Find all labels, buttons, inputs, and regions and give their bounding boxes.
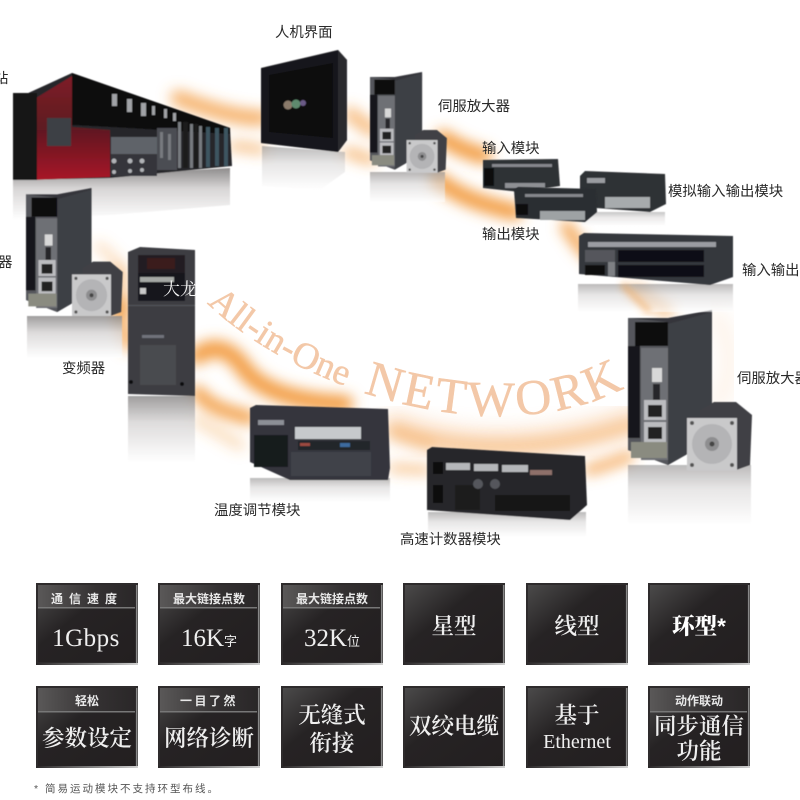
card: easy parameter setup: 参数设定 [42,726,132,751]
card: synchronous communication: 同步通信 [654,714,744,739]
card: synchronous communication [648,686,750,768]
card: line topology [526,583,628,665]
card: twisted pair cable [403,686,505,768]
card: communication speed: 1Gbps [52,625,120,652]
device: CPU rack [13,73,232,220]
tagline: All-in-One NETWORK: All-in-One NETWORK [206,292,624,418]
card: communication speed [36,583,138,665]
device: HMI touch panel [261,50,347,190]
label: analog IO module: 模拟输入输出模块 [668,183,783,200]
card: max link points 16K: 最大链接点数 [173,591,245,606]
card: network diagnostics [158,686,260,768]
card: seamless connection [281,686,383,768]
card: max link points 32K: 32K位 [304,625,360,652]
device: high-speed counter module [427,447,587,537]
card: network diagnostics: 一目了然 [180,693,238,708]
card: Ethernet based: Ethernet [543,731,611,753]
card: ring topology [648,583,750,665]
card: star topology: 星型 [431,614,477,639]
label: temperature module: 温度调节模块 [214,502,300,519]
card: max link points 16K [158,583,260,665]
card: max link points 32K: 最大链接点数 [296,591,368,606]
device: output module [514,187,597,222]
device: temperature control module [250,405,390,502]
card: twisted pair cable: 双绞电缆 [409,714,499,739]
card: easy parameter setup [36,686,138,768]
label: counter module: 高速计数器模块 [400,531,501,548]
device: analog IO module [580,171,666,226]
card: synchronous communication: 动作联动 [675,693,723,708]
watermark: 大龙 [163,280,197,299]
card: line topology: 线型 [554,614,600,639]
footnote: * 简易运动模块不支持环型布线。 [34,782,220,795]
card: seamless connection: 衔接 [309,731,355,756]
label: HMI: 人机界面 [275,24,333,41]
label: inverter: 变频器 [62,360,105,377]
device: input module [483,159,560,192]
card: seamless connection: 无缝式 [298,703,366,728]
label: output module: 输出模块 [482,226,540,243]
label: servo amplifier top: 伺服放大器 [438,98,510,115]
card: star topology [403,583,505,665]
card: synchronous communication: 功能 [676,739,722,764]
card: Ethernet based: 基于 [554,703,600,728]
card: easy parameter setup: 轻松 [75,693,99,708]
device: servo amplifier (left) [26,188,123,358]
card: max link points 32K [281,583,383,665]
card: communication speed: 通信速度 [51,591,123,606]
reflection [13,168,230,220]
card: max link points 16K: 16K字 [181,625,237,652]
card: network diagnostics: 网络诊断 [164,726,254,751]
card: Ethernet based [526,686,628,768]
device: servo amplifier (top) [370,72,447,202]
device: servo amplifier (right) [628,310,752,525]
device: IO module [578,233,733,312]
card: ring topology: 环型* [672,614,726,639]
device: inverter [128,247,195,462]
network glow ring [98,98,729,470]
label: input module: 输入模块 [482,140,540,157]
